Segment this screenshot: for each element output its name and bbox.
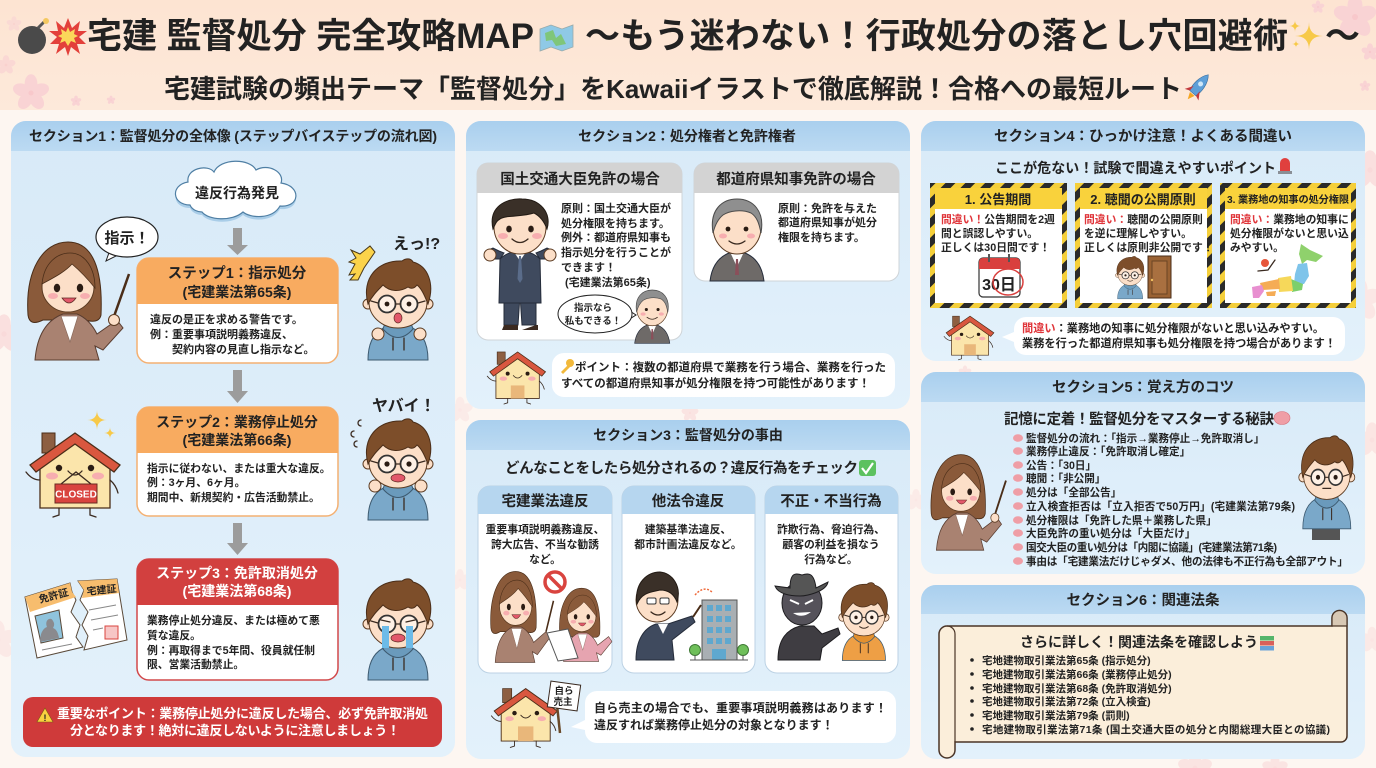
law list: 宅地建物取引業法第66条 (業務停止処分): [982, 668, 1172, 681]
step 1 box: [137, 258, 338, 363]
scroll with law list: [939, 610, 1347, 758]
card: governor: 権限を持ちます。: [778, 230, 865, 244]
tips list: 立入検査拒否は「立入拒否で50万円」(宅建業法第79条): [1026, 500, 1295, 513]
law list: [970, 654, 1330, 736]
section 4 header: セクション4：ひっかけ注意！よくある間違い: [994, 127, 1292, 145]
law list: 宅地建物取引業法第68条 (免許取消処分): [982, 682, 1172, 695]
card: minister: (宅建業法第65条): [565, 275, 651, 289]
house with sign: 売主: [553, 696, 573, 708]
icon: map: [540, 25, 573, 51]
step 2 box: 期間中、新規契約・広告活動禁止。: [147, 490, 320, 504]
important alert: !: [44, 713, 46, 723]
subheading: ここが危ない！試験で間違えやすいポイント: [995, 160, 1276, 176]
card 3: governor authority: 間違い：業務地の知事に: [1230, 212, 1349, 226]
card: governor: 原則：免許を与えた: [778, 201, 877, 215]
law list: 宅地建物取引業法第79条 (罰則): [982, 709, 1130, 722]
card: governor: [694, 163, 899, 281]
house with sign: 自ら: [554, 685, 574, 697]
section 5 header: セクション5：覚え方のコツ: [1052, 378, 1234, 396]
boy: [1299, 436, 1355, 540]
card: minister: 指示処分を行うことが: [561, 245, 671, 259]
boy crying: [363, 579, 433, 680]
section 3 header: セクション3：監督処分の事由: [593, 427, 783, 443]
title text right: 〜もう迷わない！行政処分の落とし穴回避術: [585, 17, 1288, 56]
card: fraud: [765, 486, 898, 673]
card: fraud: 行為など。: [804, 552, 858, 566]
step 3 box: (宅建業法第68条): [183, 583, 291, 599]
house closed: CLOSED: [55, 490, 97, 500]
important alert: 重要なポイント：業務停止処分に違反した場合、必ず免許取消処: [57, 706, 428, 721]
card 1: notice period: [930, 183, 1067, 308]
warning bubble: 間違い：業務地の知事に処分権限がないと思い込みやすい。: [1022, 321, 1324, 335]
card: minister: できます！: [561, 261, 616, 274]
icon: calendar: 30日: [982, 277, 1016, 294]
panel: section 3 grounds: [466, 420, 910, 759]
card 2: hearing: を逆に理解しやすい。: [1084, 226, 1192, 240]
tips list: 業務停止違反：「免許取消し確定」: [1026, 445, 1190, 458]
point bubble: ポイント：複数の都道府県で業務を行う場合、業務を行った: [575, 360, 886, 374]
step 1 box: (宅建業法第65条): [183, 284, 291, 300]
card: minister: [477, 163, 682, 343]
card 3: governor authority: 3. 業務地の知事の処分権限: [1227, 193, 1349, 206]
icon: bomb: [18, 18, 49, 54]
boy panicked: ヤバイ！: [372, 398, 436, 415]
speech bubble: self seller: 違反すれば業務停止処分の対象となります！: [594, 717, 834, 732]
tips list: 事由は「宅建業法だけじゃダメ、他の法律も不正行為も全部アウト」: [1026, 555, 1348, 568]
law list: 宅地建物取引業法第71条 (国土交通大臣の処分と内閣総理大臣との協議): [982, 723, 1330, 736]
section 2 header: [466, 121, 910, 151]
section 4 header: [921, 121, 1365, 151]
step 1 box: 契約内容の見直し指示など。: [172, 342, 314, 356]
step 2 box: ステップ2：業務停止処分: [156, 414, 318, 430]
teacher: [931, 455, 1006, 550]
card 1: notice period: 間と誤認しやすい。: [941, 227, 1038, 240]
card: fraud: 不正・不当行為: [780, 492, 882, 510]
card 2: hearing: 間違い：聴聞の公開原則: [1084, 212, 1203, 226]
section 6 header: セクション6：関連法条: [1066, 591, 1220, 609]
step 2 box: (宅建業法第66条): [183, 432, 291, 448]
panel: section 2 authority: [466, 121, 910, 409]
icon: explosion: [49, 18, 87, 56]
illustration: man and building: [636, 572, 748, 660]
tips list: 国交大臣の重い処分は「内閣に協議」(宅建業法第71条): [1026, 541, 1277, 554]
house mascot: [944, 316, 994, 360]
step 3 box: 例：再取得まで5年間、役員就任制: [147, 643, 315, 657]
speech bubble: [558, 295, 636, 333]
tips list: 公告：「30日」: [1026, 459, 1096, 472]
subheading: どんなことをしたら処分されるの？違反行為をチェック: [505, 459, 858, 477]
panel: section 4 pitfalls: [921, 121, 1365, 361]
house mascot: [487, 352, 546, 404]
card: other laws: 建築基準法違反、: [645, 522, 731, 536]
illustration: con man and victim: [775, 574, 889, 661]
section 1 header: セクション1：監督処分の全体像 (ステップバイステップの流れ図): [29, 128, 437, 144]
section 6 header: [921, 585, 1365, 614]
card: takken law: [478, 486, 612, 673]
boy surprised: えっ!?: [393, 235, 440, 253]
important alert: 分となります！絶対に違反しないように注意しましょう！: [70, 723, 400, 738]
step 3 box: 業務停止処分違反、または極めて悪: [147, 613, 320, 627]
card: governor: 都道府県知事が処分: [778, 215, 877, 229]
card: takken law: 誇大広告、不当な勧誘: [491, 537, 599, 551]
title text left: 宅建 監督処分 完全攻略MAP: [87, 17, 534, 56]
icon: sparkles: [1289, 20, 1323, 50]
arrow 2: [227, 370, 248, 403]
card 2: hearing: 2. 聴聞の公開原則: [1090, 192, 1196, 207]
small governor: [635, 290, 670, 343]
card: fraud: 顧客の利益を損なう: [782, 537, 880, 551]
subheading: 記憶に定着！監督処分をマスターする秘訣: [1004, 410, 1274, 428]
point bubble: すべての都道府県知事が処分権限を持つ可能性があります！: [561, 376, 870, 390]
step 2 box: 指示に従わない、または重大な違反。: [147, 461, 331, 475]
scroll heading: さらに詳しく！関連法条を確認しよう: [1020, 634, 1258, 650]
panel: section 1 overview: [11, 121, 455, 757]
arrow 3: [227, 523, 248, 555]
card: takken law: 重要事項説明義務違反、: [486, 522, 604, 536]
step 2 box: [137, 407, 338, 516]
card: governor: 都道府県知事免許の場合: [716, 170, 876, 188]
card: takken law: 宅建業法違反: [502, 492, 588, 510]
card: minister: 原則：国土交通大臣が: [561, 201, 671, 215]
card 3: governor authority: 処分権限がないと思い込: [1230, 226, 1349, 240]
section 2 header: セクション2：処分権者と免許権者: [578, 128, 796, 144]
arrow 1: [227, 228, 248, 255]
boy panicked: [351, 398, 436, 520]
step 1 box: ステップ1：指示処分: [168, 264, 307, 282]
card: other laws: 他法令違反: [652, 492, 724, 510]
card: fraud: 詐欺行為、脅迫行為、: [777, 522, 885, 536]
step 1 box: 違反の是正を求める警告です。: [150, 312, 303, 326]
card 3: governor authority: [1220, 183, 1356, 308]
section 3 header: [466, 420, 910, 450]
speech bubble: 指示なら: [574, 302, 612, 314]
broken license: 宅建証: [86, 582, 117, 598]
panel: section 5 tips: [921, 372, 1365, 574]
card: other laws: [622, 486, 755, 673]
point bubble: [552, 353, 895, 397]
boy and door: [1115, 256, 1171, 299]
broken license: 免許証: [37, 586, 70, 606]
cloud: violation found: 違反行為発見: [195, 185, 279, 201]
panel: section 6 related laws: [921, 585, 1365, 759]
map of Japan: [1252, 244, 1323, 298]
card: other laws: 都市計画法違反など。: [634, 537, 742, 551]
card: minister: 国土交通大臣免許の場合: [500, 170, 660, 188]
broken license: [25, 579, 127, 658]
card: takken law: など。: [529, 552, 561, 566]
header band: [0, 0, 1376, 112]
section 5 header: [921, 372, 1365, 402]
law list: 宅地建物取引業法第65条 (指示処分): [982, 654, 1151, 667]
teacher with speech bubble: [28, 217, 158, 360]
card 1: notice period: 1. 公告期間: [965, 192, 1031, 207]
important alert: [23, 697, 442, 747]
warning bubble: 業務を行った都道府県知事も処分権限を持つ場合があります！: [1022, 336, 1336, 350]
house closed: [26, 410, 120, 517]
card 1: notice period: 間違い！公告期間を2週: [941, 212, 1055, 226]
boy surprised: [349, 235, 440, 360]
warning bubble: [1002, 317, 1345, 355]
teacher with speech bubble: 指示！: [104, 229, 150, 247]
card 2: hearing: [1075, 183, 1214, 308]
card 1: notice period: 正しくは30日間です！: [941, 241, 1050, 254]
tips list: 処分権限は「免許した県＋業務した県」: [1026, 514, 1217, 527]
house with sign: [491, 681, 581, 747]
tips list: 聴聞：「非公開」: [1026, 472, 1105, 485]
speech bubble: self seller: [571, 691, 896, 743]
card: minister: 処分権限を持ちます。: [561, 216, 670, 230]
step 3 box: 質な違反。: [147, 628, 201, 642]
subtitle: 宅建試験の頻出テーマ「監督処分」をKawaiiイラストで徹底解説！合格への最短ルート: [164, 74, 1182, 104]
tips list: 処分は「全部公告」: [1026, 486, 1121, 499]
tips list: 監督処分の流れ：「指示→業務停止→免許取消し」: [1026, 432, 1264, 445]
minister figure: [484, 199, 556, 330]
step 3 box: ステップ3：免許取消処分: [156, 565, 318, 581]
card 2: hearing: 正しくは原則非公開です！: [1084, 240, 1214, 254]
step 1 box: 例：重要事項説明義務違反、: [150, 327, 293, 341]
title closing tilde: 〜: [1325, 17, 1360, 56]
tips list: 大臣免許の重い処分は「大臣だけ」: [1026, 527, 1196, 540]
step 2 box: 例：3ヶ月、6ヶ月。: [147, 476, 245, 489]
speech bubble: 私もできる！: [565, 315, 621, 327]
governor figure: [710, 199, 764, 281]
section 1 header: [11, 121, 455, 151]
tips list: [1013, 432, 1348, 568]
icon: rocket: [1181, 69, 1215, 105]
cloud: violation found: [175, 161, 296, 222]
illustration: two women: [491, 572, 612, 662]
law list: 宅地建物取引業法第72条 (立入検査): [982, 695, 1151, 708]
card: minister: 例外：都道府県知事も: [561, 230, 671, 244]
speech bubble: self seller: 自ら売主の場合でも、重要事項説明義務はあります！: [594, 700, 887, 715]
card 3: governor authority: みやすい。: [1230, 241, 1284, 254]
title: [18, 17, 1360, 56]
step 3 box: 限、営業活動禁止。: [147, 657, 244, 671]
step 3 box: [137, 559, 338, 680]
